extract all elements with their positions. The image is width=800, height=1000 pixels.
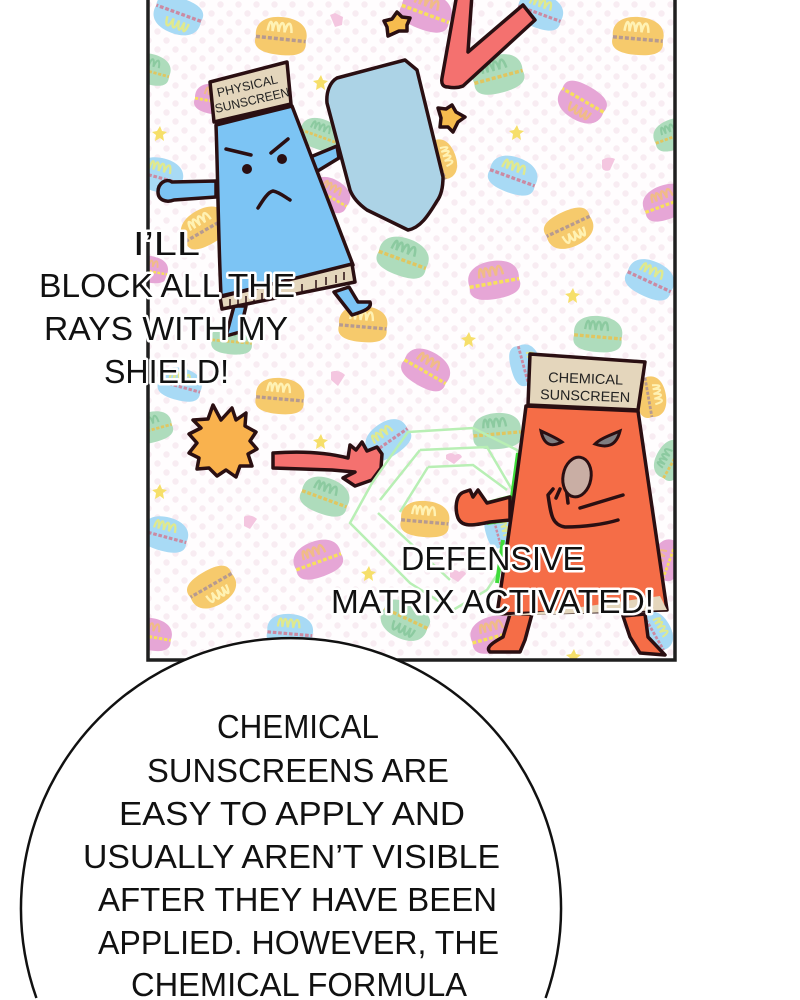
cap label: PHYSICAL (216, 72, 279, 100)
speech: shield line (39, 225, 295, 390)
shield (327, 60, 443, 230)
eyes (541, 431, 620, 446)
face (226, 139, 290, 208)
speech: defensive matrix line (331, 540, 654, 620)
mouth (560, 455, 594, 499)
bottle cuff (220, 264, 355, 309)
cap label: SUNSCREEN (540, 386, 630, 405)
speech: shield line: SHIELD! (104, 353, 229, 390)
icon: star upper (384, 12, 410, 36)
panel border (148, 0, 675, 660)
cap label (540, 369, 630, 405)
speech: shield line: I’LL (133, 225, 200, 262)
bottle cap (528, 354, 645, 410)
cap label: CHEMICAL (548, 369, 624, 388)
right arm (308, 146, 339, 172)
bottle body (497, 406, 667, 614)
cap label: SUNSCREEN (214, 85, 291, 116)
red check shape at top (442, 0, 535, 88)
left arm (158, 181, 216, 201)
balloon text: APPLIED. HOWEVER, THE (98, 924, 499, 961)
character: chemical sunscreen (456, 354, 667, 655)
speech: shield line: BLOCK ALL THE (39, 267, 295, 304)
balloon text: USUALLY AREN’T VISIBLE (83, 838, 500, 875)
right arm and hand (548, 486, 623, 527)
speech balloon (21, 638, 561, 1000)
bottle body (216, 106, 353, 296)
speech: defensive matrix line: MATRIX ACTIVATED! (331, 583, 654, 620)
right leg (623, 614, 665, 655)
icon: burst sun (189, 405, 257, 477)
speech: defensive matrix line: DEFENSIVE (401, 540, 584, 577)
defensive matrix hexagons (350, 428, 543, 610)
balloon text: CHEMICAL (217, 708, 379, 745)
bottle cap (210, 62, 291, 122)
panel: macaron background (126, 0, 698, 664)
speech: shield line: RAYS WITH MY (44, 310, 288, 347)
balloon text: SUNSCREENS ARE (147, 752, 449, 789)
character: physical sunscreen (158, 62, 370, 336)
left leg (226, 306, 246, 336)
left leg (489, 614, 532, 652)
icon: star lower (438, 105, 465, 132)
arrow: red ray (273, 442, 382, 486)
right leg (334, 287, 370, 315)
balloon text: EASY TO APPLY AND (119, 795, 465, 832)
balloon text (83, 708, 500, 1000)
balloon text: AFTER THEY HAVE BEEN (98, 881, 497, 918)
left arm and hand (456, 490, 510, 525)
balloon outline (21, 638, 561, 998)
bottle cuff (500, 596, 667, 616)
